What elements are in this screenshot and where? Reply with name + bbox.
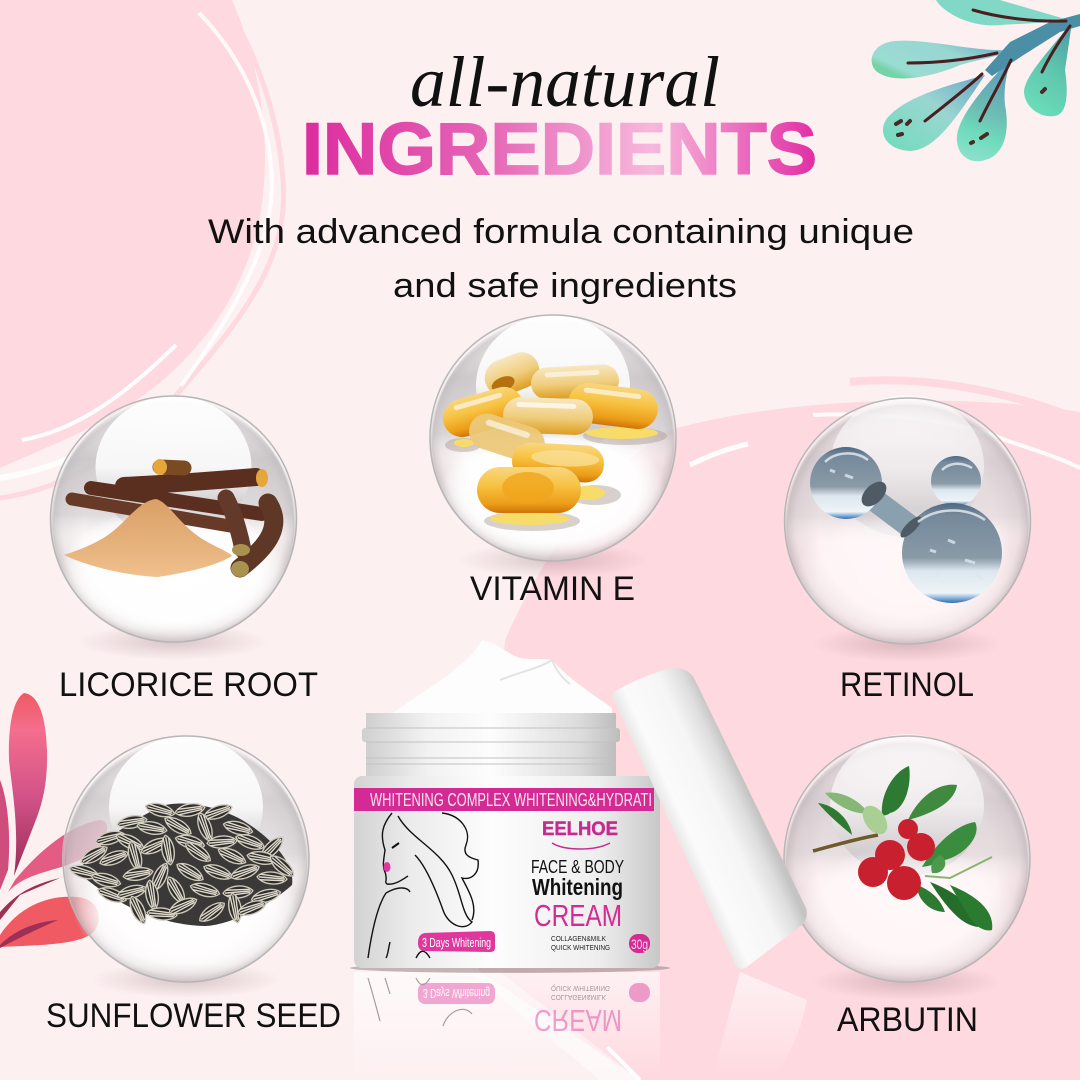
- label: licorice root: LICORICE ROOT: [59, 666, 318, 704]
- product name: CREAM: [534, 898, 622, 933]
- jar shadow: [350, 963, 670, 973]
- ingredient: retinol bubble: [784, 395, 1032, 662]
- label: retinol: RETINOL: [840, 666, 974, 704]
- product name: COLLAGEN&MILK: [551, 936, 606, 943]
- jar lid: [612, 668, 807, 969]
- badge: 30g: 30g: [631, 936, 648, 952]
- capsule shadows: [445, 427, 667, 531]
- jar neck: [362, 713, 620, 779]
- licorice sticks: [72, 467, 274, 568]
- ingredient: licorice root bubble: [50, 395, 298, 660]
- badge: 30g: [629, 934, 650, 953]
- vitamin E capsules: [438, 347, 660, 513]
- background: lower-right pink swoosh: [478, 380, 1080, 1080]
- ingredient: arbutin bubble: [783, 734, 1031, 1000]
- retinol molecule: [810, 447, 1002, 603]
- heading: INGREDIENTS: INGREDIENTS: [302, 109, 817, 190]
- licorice cut ends: [153, 459, 268, 577]
- product name: [531, 857, 624, 952]
- heading: all-natural: all-natural: [410, 42, 720, 122]
- ingredient: vitamin E bubble: [429, 314, 677, 578]
- brand: EELHOE: EELHOE: [542, 819, 618, 840]
- product reflection: COLLAGEN&MILK: [551, 993, 606, 1000]
- pink label band: [354, 788, 654, 811]
- label: vitamin E: VITAMIN E: [470, 570, 635, 608]
- subtitle: [208, 213, 914, 305]
- product reflection: 3 Days Whitening: [423, 986, 490, 1000]
- decoration: red leaves bottom left: [0, 693, 107, 948]
- capsule reflections: [454, 427, 658, 525]
- arbutin berries: [858, 819, 935, 900]
- product reflection: [354, 972, 807, 1080]
- label: sunflower seed: SUNFLOWER SEED: [46, 997, 341, 1035]
- band text: WHITENING COMPLEX WHITENING&HYDRATI: [370, 790, 652, 810]
- illustration: lips: [384, 862, 390, 872]
- product: cream jar: [350, 640, 807, 973]
- badge: 3 Days Whitening: [418, 931, 495, 952]
- illustration: woman line art: [368, 813, 478, 958]
- product name: Whitening: [532, 874, 623, 900]
- product reflection: CREAM: [534, 1003, 622, 1038]
- subtitle: With advanced formula containing unique: [208, 213, 914, 251]
- badge: 3 Days Whitening: 3 Days Whitening: [422, 936, 491, 950]
- decoration: teal leaves top right: [872, 0, 1080, 161]
- product reflection: QUICK WHITENING: [551, 984, 610, 991]
- product name: FACE & BODY: [531, 857, 624, 877]
- product name: QUICK WHITENING: [551, 945, 610, 952]
- sunflower seed pile: [68, 800, 297, 926]
- ingredient: sunflower seed bubble: [62, 735, 310, 998]
- whipped cream: [392, 640, 612, 716]
- jar body: [354, 776, 660, 968]
- background: top-left pink swoosh: [0, 0, 284, 498]
- licorice powder: [64, 499, 232, 577]
- arbutin sprig: [813, 766, 992, 930]
- subtitle: and safe ingredients: [393, 267, 737, 305]
- smile curve: [552, 843, 610, 849]
- label: arbutin: ARBUTIN: [837, 1001, 978, 1039]
